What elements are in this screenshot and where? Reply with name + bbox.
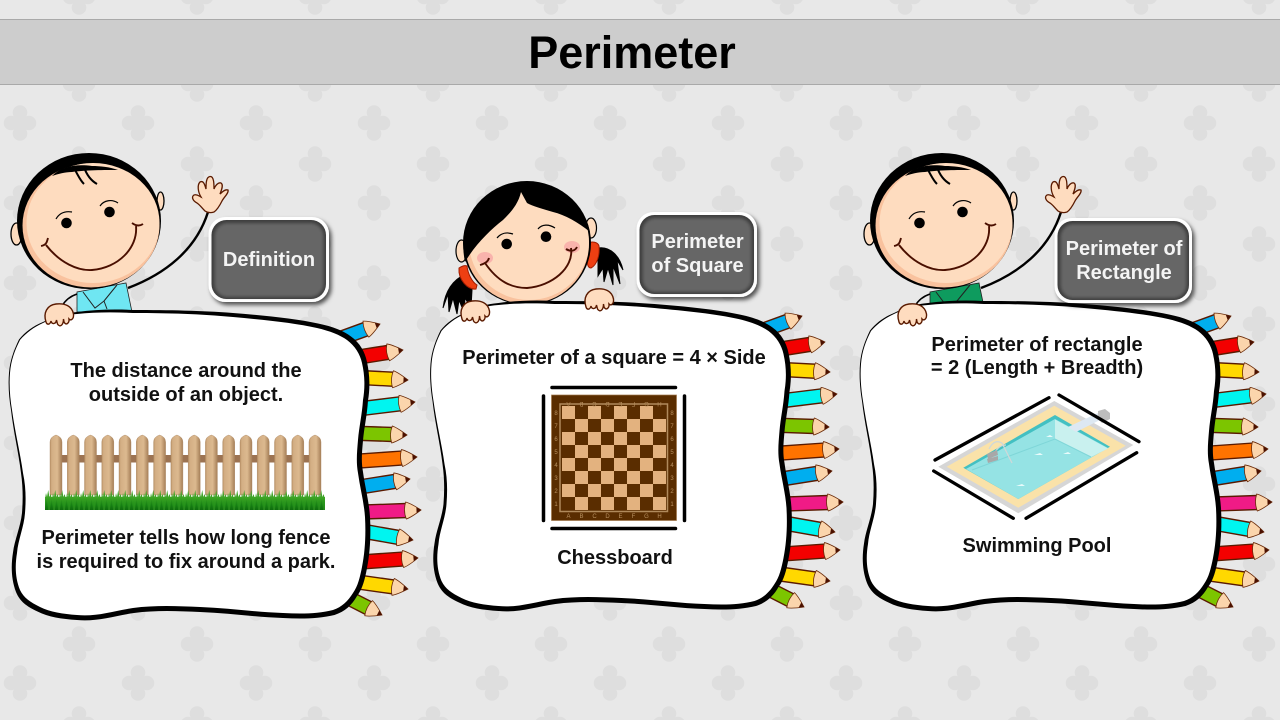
illustration: chessboard: 4 [554,463,558,469]
hand over card [898,304,927,326]
illustration: chessboard: D [605,400,610,406]
illustration: chessboard: A [566,400,571,406]
illustration: chessboard: F [632,514,636,520]
illustration: chessboard: 3 [554,476,558,482]
character: waving boy [11,153,228,312]
title band [0,20,1280,84]
text: definition sentence: outside of an object. [89,384,283,406]
illustration: chessboard: 4 [670,463,674,469]
illustration: chessboard: B [579,400,584,406]
pencils: square [710,308,843,615]
badge: Perimeter of Rectangle: Perimeter of [1066,238,1183,260]
character: waving boy in green [864,153,1081,312]
illustration: chessboard: 2 [670,489,674,495]
text: square formula: Perimeter of a square = 4 × Side [462,347,766,369]
illustration: chessboard: 2 [554,489,558,495]
illustration: chessboard: E [618,400,623,406]
illustration: chessboard: 5 [670,450,674,456]
text: pool caption: Swimming Pool [963,535,1111,557]
text: rectangle formula: = 2 (Length + Breadth) [931,357,1143,379]
illustration: swimming pool [934,395,1139,518]
badge: Perimeter of Square: Perimeter [651,231,744,253]
illustration: chessboard: G [644,514,649,520]
panel: definition [9,153,421,623]
illustration: chessboard: 6 [670,437,674,443]
illustration: chessboard: C [592,400,597,406]
title: Perimeter [528,27,736,78]
badge: Definition [208,217,329,302]
character: girl [443,181,623,314]
illustration: chessboard: D [605,514,610,520]
illustration: chessboard: 6 [554,437,558,443]
badge: Perimeter of Square [636,212,757,297]
card: rectangle [860,301,1221,611]
illustration: chessboard: 8 [554,411,558,417]
card: definition [9,310,370,620]
illustration: chessboard: 1 [670,502,674,508]
illustration: chessboard [544,388,684,528]
badge: Definition: Definition [223,249,315,271]
hand over card [45,304,74,326]
illustration: chessboard: 7 [554,424,558,430]
badge: Perimeter of Square: of Square [651,255,744,277]
panel: perimeter of rectangle [860,153,1272,615]
illustration: chessboard: 3 [670,476,674,482]
text: definition sentence: The distance around the [70,360,302,382]
illustration: chessboard: E [618,514,623,520]
illustration: chessboard: H [657,514,662,520]
illustration: chessboard: 1 [554,502,558,508]
illustration: chessboard: 8 [670,411,674,417]
illustration: chessboard: B [579,514,584,520]
card: square [430,301,792,611]
illustration: chessboard: A [566,514,571,520]
illustration: chessboard: 5 [554,450,558,456]
badge: Perimeter of Rectangle [1054,218,1192,303]
text: chessboard caption: Chessboard [557,547,673,569]
pencils: rectangle [1139,308,1272,615]
text: rectangle formula: Perimeter of rectangle [931,334,1143,356]
pencils: definition [288,316,421,623]
illustration: wooden fence [45,435,325,510]
illustration: chessboard: 7 [670,424,674,430]
panel: perimeter of square [430,181,843,615]
hands over card [461,289,614,323]
badge: Perimeter of Rectangle: Rectangle [1076,262,1172,284]
text: fence explanation: Perimeter tells how long fence [42,527,330,549]
illustration: chessboard: C [592,514,597,520]
illustration: chessboard: H [657,400,662,406]
illustration: chessboard: F [631,400,635,406]
text: fence explanation: is required to fix around a park. [37,551,335,573]
illustration: chessboard: G [644,400,649,406]
